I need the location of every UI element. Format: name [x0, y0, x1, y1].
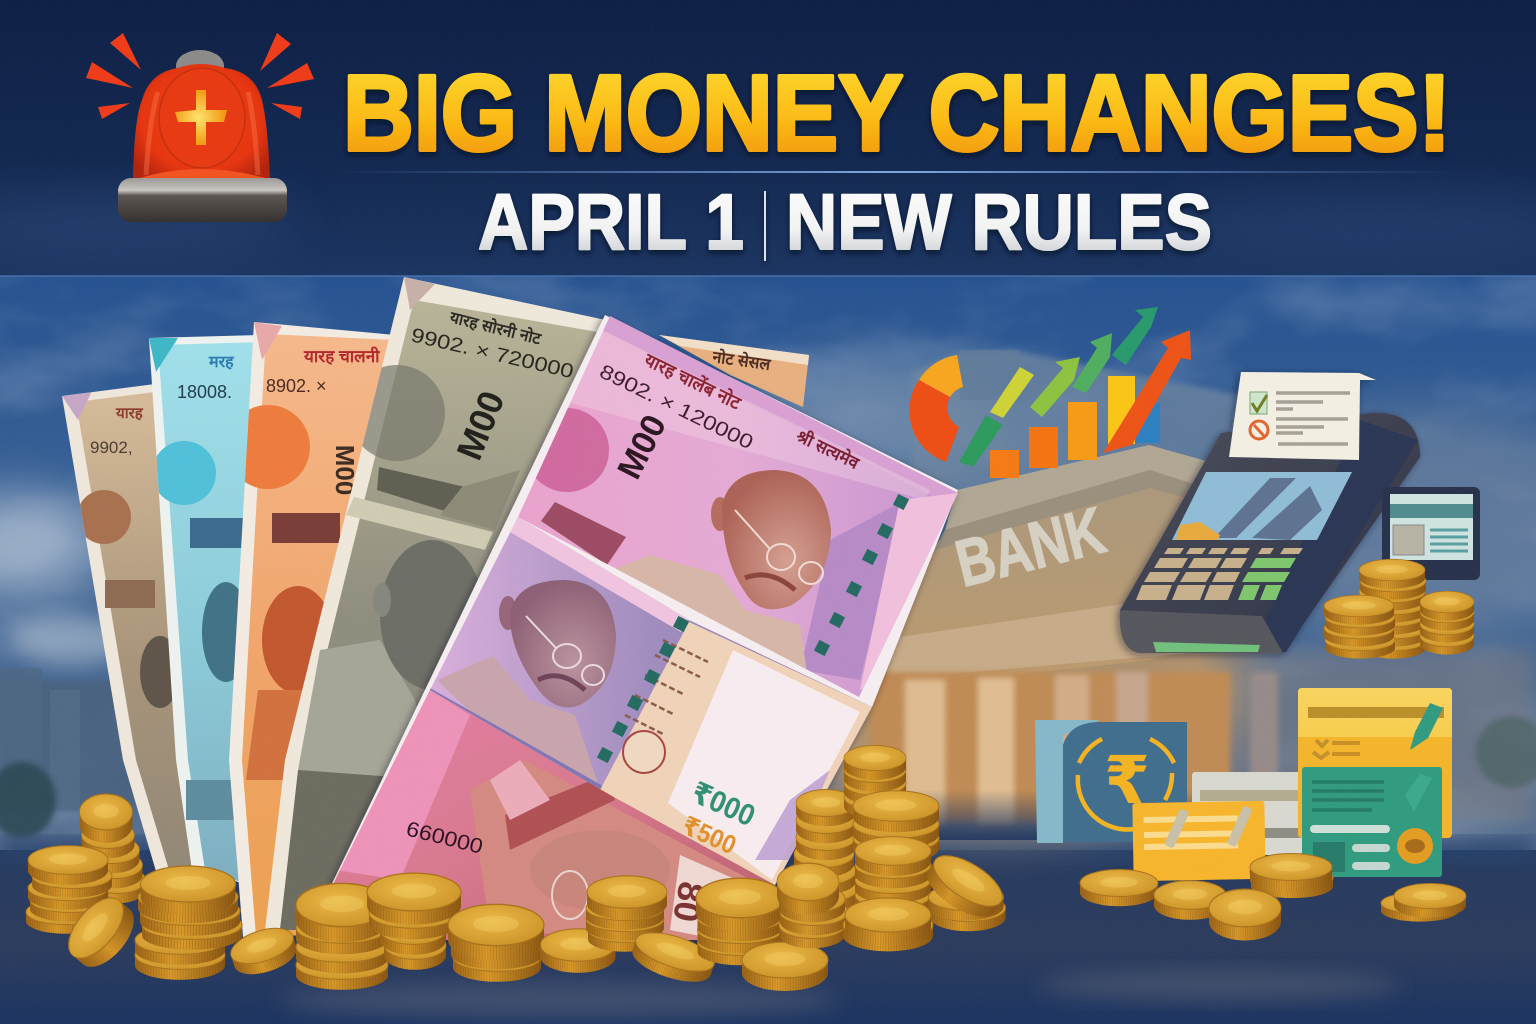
denomination: ₹000 — [686, 776, 760, 833]
keypad — [1136, 548, 1303, 600]
upper note: श्री सत्यमेव — [792, 425, 864, 474]
subtitle — [478, 177, 1212, 266]
banknote: peach backing: नोट सेसल — [710, 347, 773, 374]
icon: mobile device — [1382, 487, 1480, 580]
terminal screen — [1172, 472, 1352, 540]
siren dome — [133, 64, 270, 186]
green card — [1302, 767, 1442, 877]
subtitle: NEW RULES — [786, 177, 1212, 266]
portrait — [711, 470, 831, 609]
stack — [586, 876, 667, 952]
lower note: 80 — [665, 879, 712, 925]
siren base — [118, 178, 287, 222]
yellow card — [1132, 801, 1266, 881]
receipt — [1229, 372, 1376, 460]
yellow folder — [1298, 688, 1452, 838]
bank sign: BANK — [948, 492, 1112, 601]
banknote: pink front — [300, 300, 970, 950]
portrait — [499, 580, 616, 708]
tilted coin — [58, 888, 144, 977]
banknote: peach backing — [659, 335, 809, 407]
card slot — [1153, 642, 1260, 652]
stack — [367, 873, 461, 970]
bank building — [760, 350, 1280, 840]
background: sky, city and ground — [0, 270, 1536, 1024]
stack — [135, 866, 242, 980]
lower note — [334, 690, 775, 940]
note text: यारह चालेंब नोट — [640, 348, 745, 414]
coin piles in front of the banknotes — [26, 745, 1010, 991]
icon: document cards — [1132, 688, 1452, 881]
note text: 660000 — [404, 818, 485, 859]
subtitle: APRIL 1 — [478, 177, 744, 266]
stack — [448, 904, 544, 982]
portrait — [380, 540, 484, 690]
banknote: orange: 8902. × — [266, 376, 327, 396]
shoulders — [437, 656, 600, 790]
coin stacks beside terminal — [1324, 559, 1474, 659]
note text: मरह — [208, 354, 235, 371]
upper note: M00 — [610, 409, 674, 485]
banknote: orange — [229, 322, 390, 937]
shoulder — [298, 640, 416, 776]
right stacks — [843, 884, 1006, 951]
donut chart — [909, 355, 963, 462]
banknote: blue — [149, 335, 254, 882]
title: BIG MONEY CHANGES! — [343, 52, 1451, 173]
note text: यारह — [115, 405, 144, 422]
rising arrows — [959, 307, 1191, 467]
note text: यारह चालनी — [303, 346, 380, 366]
bars — [990, 376, 1160, 478]
middle note: ₹500 — [678, 810, 741, 860]
siren rays — [86, 33, 314, 119]
icon: growth chart with arrows — [909, 307, 1191, 478]
icon: red alarm siren — [86, 33, 314, 222]
icon: blue rupee folder — [1035, 720, 1187, 843]
loose coins under documents — [1080, 854, 1466, 941]
rupee symbol: ₹ — [1104, 743, 1150, 817]
banknote: beige: 9902, — [90, 438, 133, 457]
left stack — [26, 846, 112, 934]
stack — [696, 878, 784, 965]
stack — [296, 883, 388, 990]
note text: यारह सोरनी नोट — [447, 307, 544, 349]
middle note — [420, 510, 880, 900]
banknote: olive: 9902. × 720000 — [409, 324, 576, 383]
banknote: blue: 18008. — [177, 382, 232, 402]
banknote: olive: M00 — [448, 385, 513, 465]
shoulders — [616, 555, 806, 670]
back stack left — [80, 794, 146, 903]
banknote: olive — [260, 270, 625, 940]
terminal body — [1120, 413, 1420, 653]
upper note — [518, 316, 958, 697]
stack — [777, 863, 848, 948]
banknote: orange: M00 — [330, 445, 360, 495]
header band — [0, 0, 1536, 277]
upper note: 8902. × 120000 — [596, 361, 756, 454]
banknote: beige — [62, 384, 192, 870]
siren plus — [175, 90, 227, 145]
icon: card payment terminal — [1120, 372, 1420, 653]
back stacks right — [794, 745, 939, 928]
grey card — [1192, 772, 1302, 855]
